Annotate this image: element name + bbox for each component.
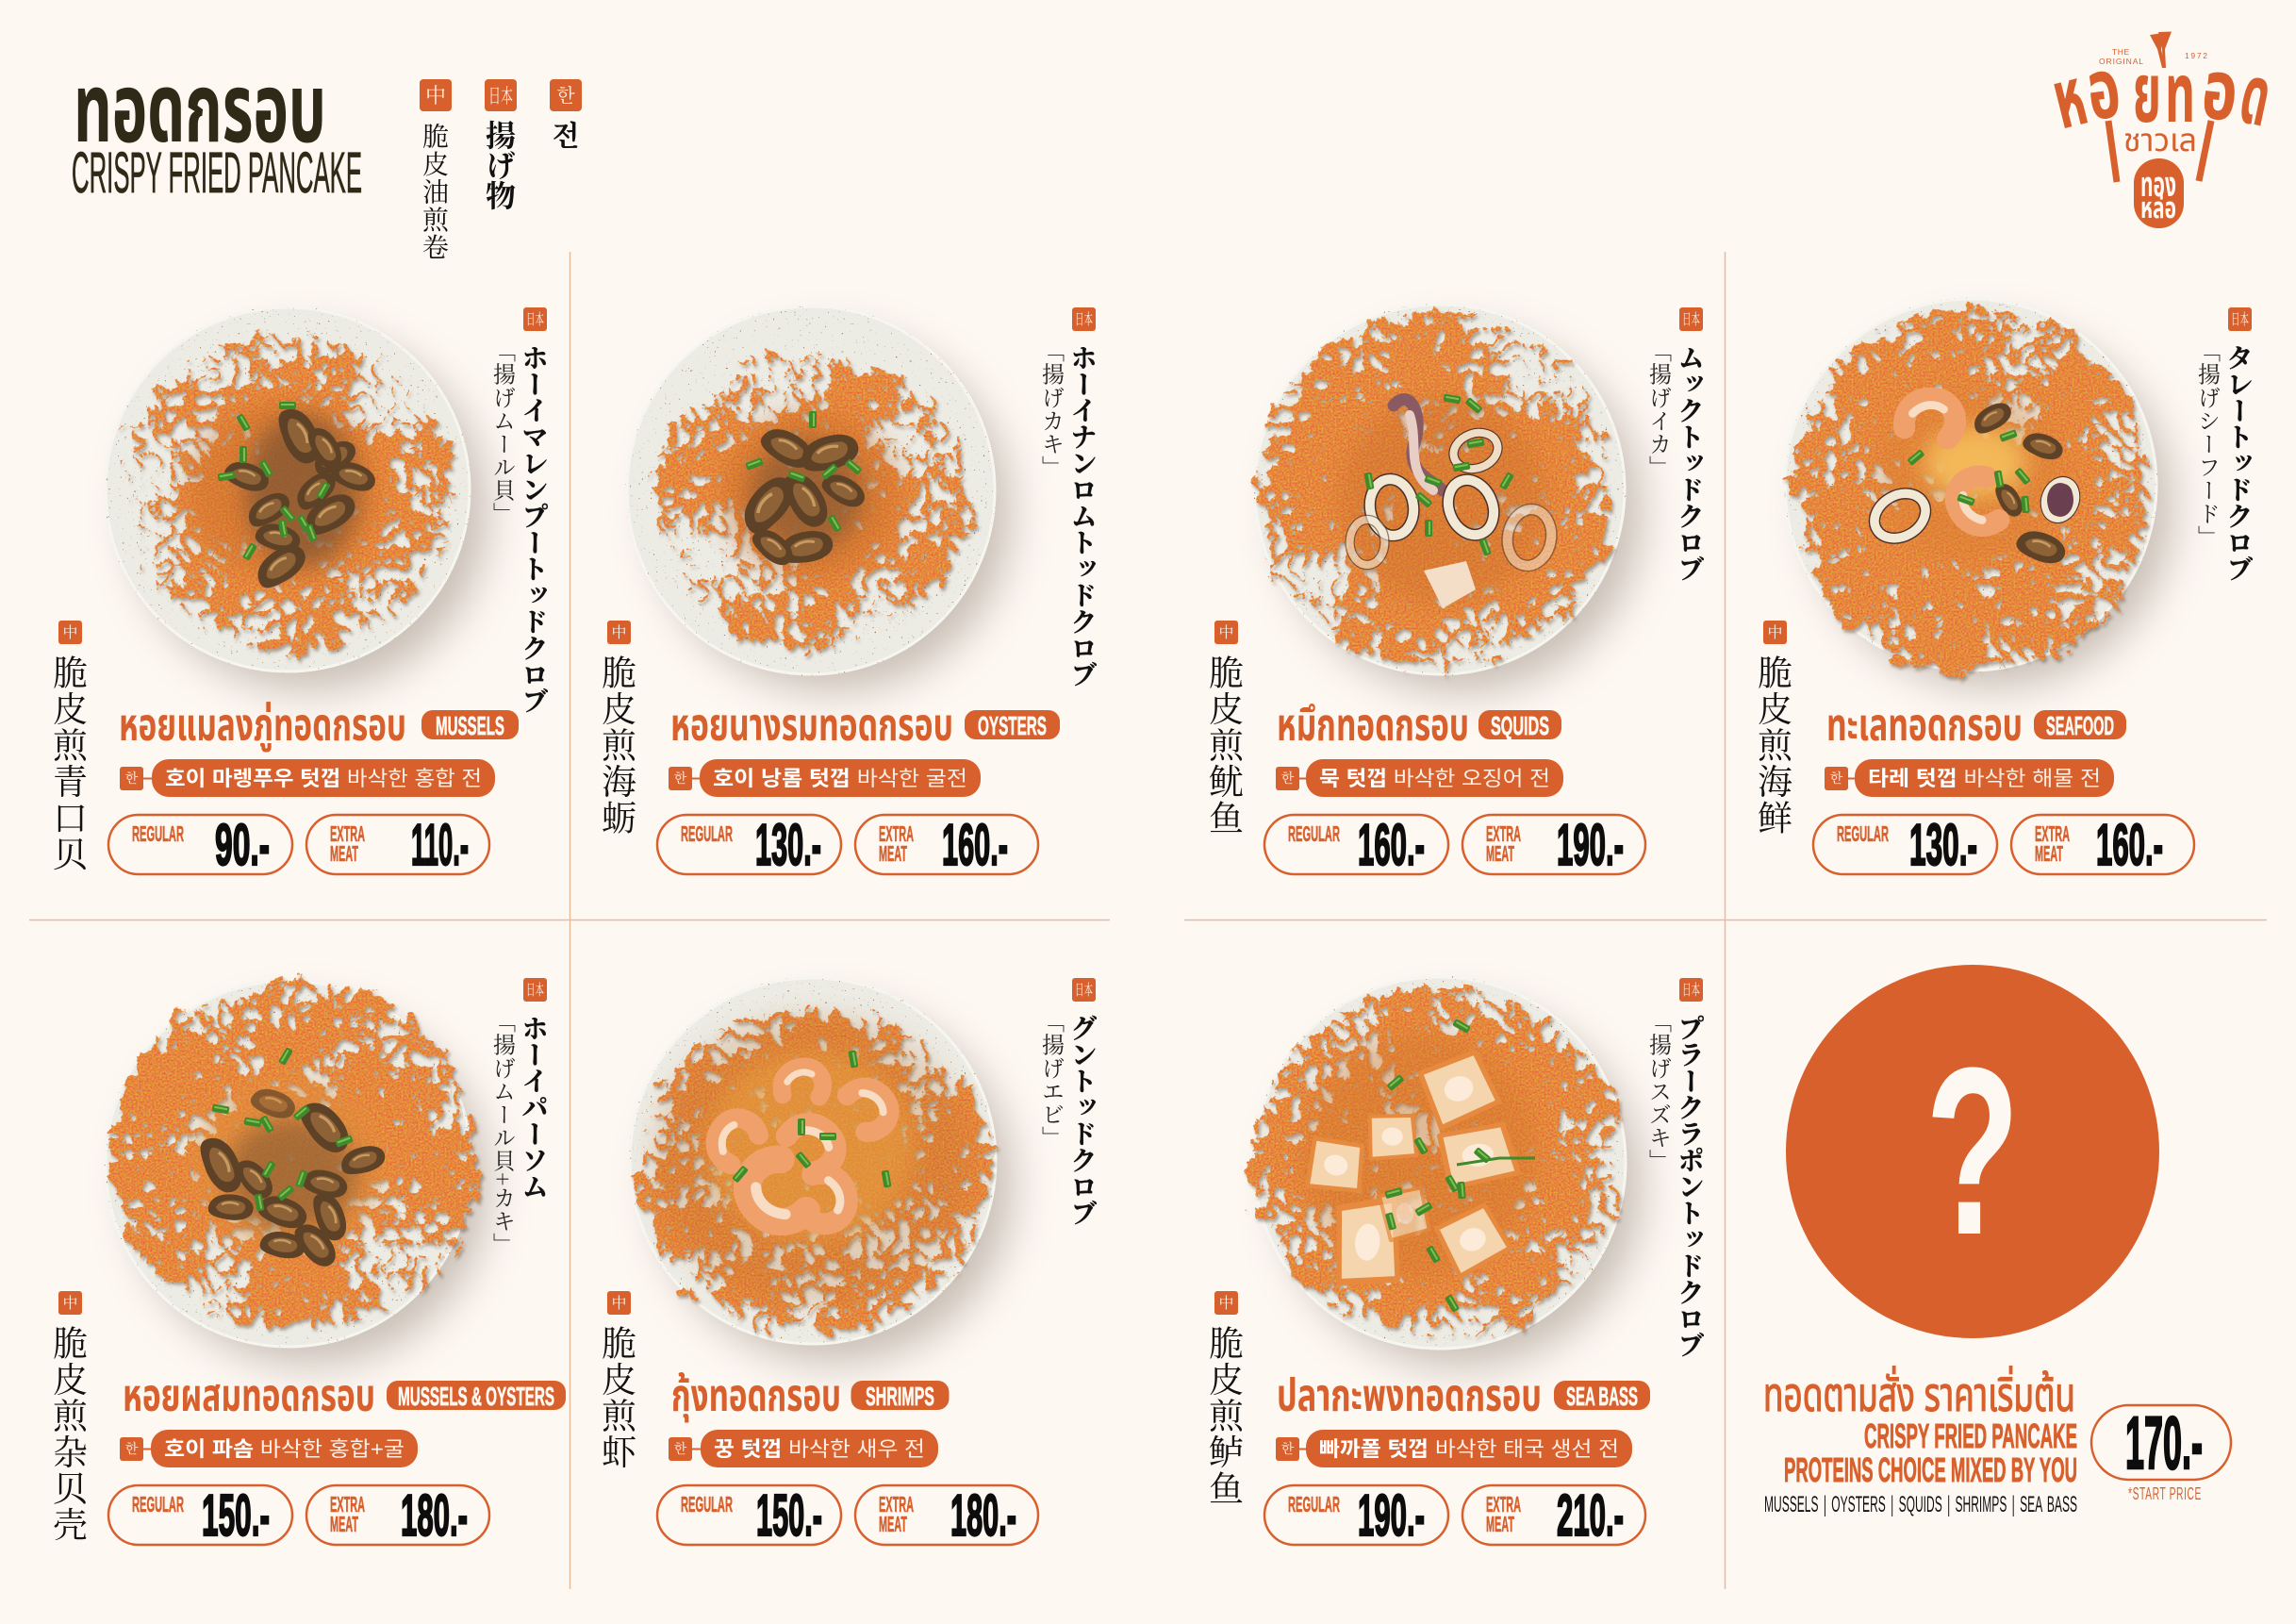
logo thai wordmark: ท — [2165, 46, 2195, 140]
price: regular: REGULAR — [681, 821, 733, 846]
korean tag — [1825, 767, 1858, 790]
japanese name: ホーイナンロムトッドクロブ — [1065, 344, 1103, 688]
price: extra meat: EXTRA — [2035, 821, 2070, 846]
english tag — [421, 710, 519, 740]
price: extra meat — [1462, 813, 1645, 878]
japanese name: プラークラポントッドクロブ — [1673, 1015, 1710, 1358]
price: extra meat: MEAT — [879, 1512, 907, 1536]
price: extra meat: MEAT — [1486, 841, 1514, 866]
price: extra meat: MEAT — [1486, 1512, 1514, 1536]
korean tag: 한 — [1281, 769, 1295, 787]
price: regular — [108, 813, 292, 878]
korean tag — [1276, 1437, 1309, 1461]
badge: Chinese: 中 — [425, 80, 446, 109]
korean pill: 호이 파솜 바삭한 홍합+굴 — [164, 1437, 405, 1461]
price: regular: REGULAR — [1288, 821, 1340, 846]
english tag — [387, 1381, 566, 1411]
japanese tag — [1679, 978, 1703, 1002]
price: regular: 150.- — [202, 1483, 270, 1549]
korean pill — [701, 1430, 938, 1467]
japanese tag — [2228, 307, 2252, 331]
logo capsule: หล่อ — [2140, 191, 2176, 224]
japanese tag — [1072, 978, 1096, 1002]
price: extra meat: 210.- — [1557, 1483, 1624, 1549]
price: regular: 130.- — [1909, 813, 1977, 878]
card text — [594, 978, 1103, 1549]
korean tag: 한 — [674, 1439, 687, 1458]
chinese tag: 中 — [611, 621, 627, 642]
english tag: SEAFOOD — [2046, 711, 2114, 740]
chinese tag: 中 — [1218, 1291, 1234, 1313]
the original 1972: ORIGINAL — [2099, 57, 2143, 66]
japanese description: 「揚げイカ」 — [1644, 340, 1677, 479]
korean tag — [120, 1437, 153, 1461]
card text — [45, 978, 566, 1549]
logo thai wordmark: อ — [2198, 41, 2242, 139]
english tag — [851, 1381, 949, 1411]
japanese name: ホーイマレンプートッドクロブ — [517, 344, 554, 714]
price: extra meat: MEAT — [879, 841, 907, 866]
korean tag: 한 — [1281, 1439, 1295, 1458]
price: regular: REGULAR — [1288, 1492, 1340, 1516]
korean pill — [152, 759, 495, 797]
korean pill: 빠까폴 텃껍 바삭한 태국 생선 전 — [1319, 1437, 1619, 1461]
photo: mussels pancake on plate — [106, 307, 487, 689]
badge: Japanese — [485, 79, 517, 111]
english tag: SQUIDS — [1491, 711, 1549, 740]
chinese name: 脆皮煎海鲜 — [1750, 655, 1801, 836]
japanese description: 「揚げムール貝」 — [488, 340, 520, 525]
price: regular: REGULAR — [132, 1492, 184, 1516]
logo thai wordmark: อ — [2081, 41, 2125, 138]
thai name: หมึกทอดกรอบ — [1277, 701, 1469, 751]
card: seafood — [1750, 296, 2259, 878]
korean pill — [700, 759, 981, 797]
japanese tag — [1072, 307, 1096, 331]
japanese description: 「揚げシーフード」 — [2193, 340, 2225, 548]
start price note: *START PRICE — [2128, 1484, 2202, 1503]
english tag: SEA BASS — [1566, 1382, 1638, 1411]
the original 1972 — [2099, 47, 2207, 66]
korean tag — [1276, 767, 1309, 790]
logo thai wordmark — [2043, 41, 2279, 146]
start price: 170.- — [2125, 1400, 2203, 1484]
price: extra meat: EXTRA — [330, 1492, 365, 1516]
price: extra meat — [1462, 1483, 1645, 1549]
price: extra meat: MEAT — [330, 1512, 358, 1536]
price: regular — [1264, 813, 1448, 878]
price: extra meat — [306, 813, 489, 878]
japanese description: 「揚げムール貝+カキ」 — [488, 1010, 520, 1256]
korean pill: 호이 마렝푸우 텃껍 바삭한 홍합 전 — [165, 767, 482, 790]
price: extra meat: EXTRA — [879, 821, 914, 846]
korean pill: 꿍 텃껍 바삭한 새우 전 — [714, 1437, 925, 1461]
chinese name: 脆皮煎青口贝 — [45, 655, 96, 872]
price: regular: 130.- — [755, 813, 821, 878]
price: regular: REGULAR — [681, 1492, 733, 1516]
thai name: หอยแมลงภู่ทอดกรอบ — [119, 701, 406, 753]
korean pill — [1855, 759, 2114, 797]
start price — [2091, 1400, 2231, 1484]
title: crispy fried pancake — [72, 55, 362, 205]
chinese tag: 中 — [1218, 621, 1234, 642]
logo capsule: ทอง — [2140, 165, 2176, 204]
english heading line 1: CRISPY FRIED PANCAKE — [1864, 1417, 2077, 1455]
price: regular: REGULAR — [1837, 821, 1889, 846]
english tag — [2034, 710, 2126, 740]
japanese tag: 日本 — [1075, 978, 1093, 1000]
price: regular: 90.- — [215, 813, 270, 878]
card text — [45, 307, 554, 878]
card: choose your own protein — [1763, 965, 2231, 1517]
logo capsule — [2134, 158, 2184, 228]
photo: sea bass pancake on plate — [1246, 977, 1641, 1366]
korean tag: 한 — [1830, 769, 1843, 787]
price: extra meat: 190.- — [1557, 813, 1624, 878]
thai name: ทะเลทอดกรอบ — [1826, 701, 2023, 751]
japanese tag — [523, 307, 547, 331]
korean pill: 호이 낭롬 텃껍 바삭한 굴전 — [713, 767, 967, 790]
logo thai wordmark: ห — [2043, 49, 2095, 146]
price: regular — [657, 813, 841, 878]
korean pill: 묵 텃껍 바삭한 오징어 전 — [1319, 767, 1550, 790]
price: extra meat: 160.- — [2096, 813, 2163, 878]
badge: Korean — [550, 79, 582, 111]
price: extra meat: 160.- — [942, 813, 1008, 878]
chinese tag — [1763, 621, 1787, 644]
korean tag: 한 — [125, 769, 139, 787]
price: extra meat — [306, 1483, 489, 1549]
korean tag: 한 — [125, 1439, 139, 1458]
price: regular — [108, 1483, 292, 1549]
price: extra meat: EXTRA — [1486, 1492, 1521, 1516]
price: regular — [1813, 813, 1997, 878]
card: mussels — [45, 307, 554, 878]
icon: question mark circle: ? — [1925, 1018, 2020, 1284]
photo: squid pancake on plate — [1250, 302, 1641, 691]
header: translations in Chinese, Japanese, Korean — [417, 79, 586, 261]
korean word: 전 — [545, 121, 586, 149]
card text — [1750, 307, 2259, 878]
chinese tag — [1214, 1291, 1238, 1315]
japanese name: グントッドクロブ — [1065, 1015, 1103, 1226]
text: CRISPY FRIED PANCAKE — [72, 141, 362, 205]
badge: Chinese — [420, 79, 452, 111]
price: extra meat — [2011, 813, 2194, 878]
chinese tag: 中 — [1767, 621, 1783, 642]
the original 1972: 1972 — [2185, 51, 2207, 60]
thai name: กุ้งทอดกรอบ — [671, 1371, 841, 1423]
icon: fan spatula — [2150, 32, 2172, 68]
price: regular: 150.- — [756, 1483, 822, 1549]
thai heading: ทอดตามสั่ง ราคาเริ่มต้น — [1763, 1366, 2075, 1421]
chinese tag — [607, 621, 631, 644]
thai title: ทอดกรอบ — [74, 55, 326, 162]
english tag: MUSSELS & OYSTERS — [398, 1382, 554, 1411]
price: extra meat: 180.- — [401, 1483, 468, 1549]
thai name: หอยผสมทอดกรอบ — [123, 1371, 375, 1421]
chinese tag — [607, 1291, 631, 1315]
card: sea bass — [1201, 977, 1710, 1549]
price: extra meat — [855, 813, 1038, 878]
card: squids — [1201, 302, 1710, 878]
price: extra meat — [855, 1483, 1038, 1549]
english tag — [1478, 710, 1561, 740]
card: shrimps — [594, 978, 1103, 1549]
price: extra meat: 180.- — [950, 1483, 1016, 1549]
chinese name: 脆皮煎杂贝壳 — [45, 1325, 96, 1543]
icon: question mark circle — [1786, 965, 2159, 1338]
japanese name: ホーイパーソム — [517, 1015, 554, 1200]
logo chao lay: ชาวเล — [2123, 123, 2197, 158]
chinese word: 脆皮油煎卷 — [417, 123, 454, 261]
chinese name: 脆皮煎虾 — [594, 1325, 645, 1470]
price: extra meat: EXTRA — [330, 821, 365, 846]
english tag: OYSTERS — [978, 711, 1047, 740]
chinese tag: 中 — [62, 1291, 78, 1313]
japanese tag: 日本 — [526, 978, 544, 1000]
card text — [1201, 978, 1710, 1549]
english tag: SHRIMPS — [866, 1382, 934, 1411]
chinese tag — [58, 621, 82, 644]
japanese name: タレートッドクロブ — [2222, 344, 2259, 582]
korean tag — [669, 767, 702, 790]
logo handles — [2108, 121, 2211, 182]
japanese tag — [523, 978, 547, 1002]
price: regular — [657, 1483, 841, 1549]
chinese name: 脆皮煎海蛎 — [594, 655, 645, 836]
japanese tag: 日本 — [1682, 978, 1700, 1000]
card text — [1201, 307, 1710, 878]
korean tag — [120, 767, 153, 790]
korean pill — [151, 1430, 418, 1467]
english tag — [1554, 1381, 1650, 1411]
korean tag — [669, 1437, 702, 1461]
photo: oysters pancake on plate — [627, 307, 1010, 690]
price: extra meat: 110.- — [411, 813, 469, 878]
price: regular: REGULAR — [132, 821, 184, 846]
japanese description: 「揚げスズキ」 — [1644, 1010, 1677, 1172]
price: extra meat: MEAT — [330, 841, 358, 866]
chinese name: 脆皮煎鱿鱼 — [1201, 655, 1252, 836]
price: regular: 160.- — [1358, 813, 1425, 878]
japanese tag — [1679, 307, 1703, 331]
chinese tag — [58, 1291, 82, 1315]
logo: hoi tod chao lay — [2043, 32, 2279, 228]
japanese tag: 日本 — [1682, 307, 1700, 329]
japanese word: 揚げ物 — [479, 120, 522, 210]
chinese name: 脆皮煎鲈鱼 — [1201, 1325, 1252, 1507]
chinese tag: 中 — [62, 621, 78, 642]
logo thai wordmark: ย — [2133, 46, 2161, 140]
japanese tag: 日本 — [526, 307, 544, 329]
japanese description: 「揚げカキ」 — [1037, 340, 1069, 479]
card text — [594, 307, 1103, 878]
badge: Korean: 한 — [556, 80, 575, 108]
japanese name: ムックトッドクロブ — [1673, 344, 1710, 582]
photo: seafood pancake on plate — [1785, 296, 2172, 687]
japanese description: 「揚げエビ」 — [1037, 1010, 1069, 1150]
thai name: หอยนางรมทอดกรอบ — [670, 701, 953, 751]
japanese tag: 日本 — [2231, 307, 2249, 329]
price: extra meat: MEAT — [2035, 841, 2063, 866]
card: mussels and oysters — [45, 972, 566, 1549]
chinese tag: 中 — [611, 1291, 627, 1313]
english tag: MUSSELS — [436, 711, 504, 740]
card: oysters — [594, 307, 1103, 878]
price: regular — [1264, 1483, 1448, 1549]
price: extra meat: EXTRA — [1486, 821, 1521, 846]
price: extra meat: EXTRA — [879, 1492, 914, 1516]
photo: shrimp pancake on plate — [628, 978, 1012, 1362]
photo: mixed shellfish pancake on plate — [102, 972, 487, 1364]
korean pill: 타레 텃껍 바삭한 해물 전 — [1868, 767, 2101, 790]
korean pill — [1306, 759, 1563, 797]
japanese tag: 日本 — [1075, 307, 1093, 329]
korean tag: 한 — [674, 769, 687, 787]
the original 1972: THE — [2112, 47, 2129, 57]
chinese tag — [1214, 621, 1238, 644]
price: regular: 190.- — [1358, 1483, 1425, 1549]
english tag — [965, 710, 1060, 740]
thai name: ปลากะพงทอดกรอบ — [1277, 1371, 1542, 1421]
korean pill — [1306, 1430, 1632, 1467]
badge: Japanese: 日本 — [488, 81, 513, 109]
